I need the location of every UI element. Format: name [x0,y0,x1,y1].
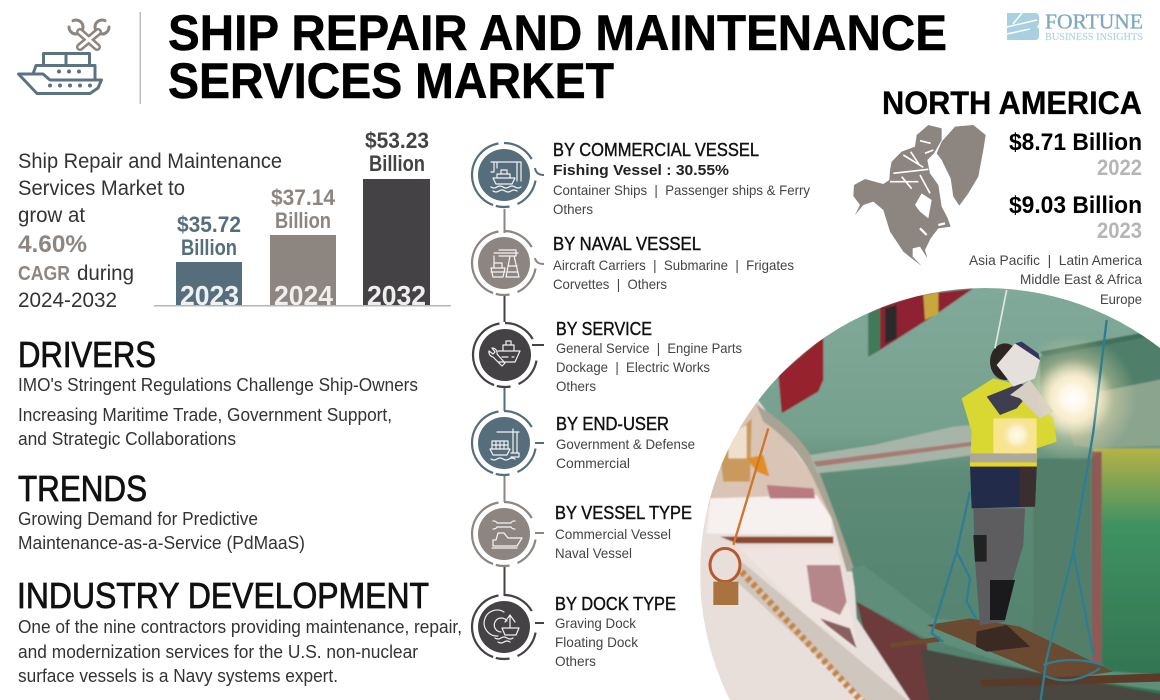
segment: by service: BY SERVICE [556,319,652,339]
bar 2032: Billion [369,151,425,176]
panel: drivers: and Strategic Collaborations [18,428,236,449]
segment: by end-user [472,411,695,475]
segment: by commercial vessel: Container Ships | Passenger ships & Ferry [553,182,810,198]
icon: ship with wrench [473,323,544,387]
segment: by vessel type: BY VESSEL TYPE [555,503,692,523]
segment: by end-user: BY END-USER [556,414,669,434]
map: North America [853,125,986,266]
segment: by commercial vessel: Others [553,201,593,217]
segment: by naval vessel: Corvettes | Others [553,276,667,292]
segment: by dock type: Graving Dock [555,615,637,631]
panel: trends [18,468,305,553]
segment: by commercial vessel: BY COMMERCIAL VESSEL [553,140,759,160]
segment: by service: Dockage | Electric Works [556,359,710,375]
icon: crane and naval ship [472,231,544,295]
icon: ship with crossed wrenches [18,20,109,94]
panel: North America statistics: 2022 [1097,155,1142,180]
segment: by naval vessel [472,231,794,295]
segment: by end-user: Government & Defense [556,436,695,452]
bar 2023 [176,212,242,311]
segment: by end-user: Commercial [556,455,630,471]
bar 2023: Billion [181,235,237,260]
panel: drivers: DRIVERS [18,334,156,375]
segment: by dock type: BY DOCK TYPE [555,594,676,614]
icon: gear and ship [472,595,544,659]
panel: industry development: INDUSTRY DEVELOPMENT [17,575,429,616]
panel: North America statistics [882,85,1142,307]
segment: by naval vessel: BY NAVAL VESSEL [553,234,701,254]
photo: welder on ship hull [700,285,1160,700]
segment: by dock type: Others [555,653,596,669]
bar 2032 [363,128,430,311]
segment: by service [473,319,742,394]
icon: ship in dock [472,143,544,207]
title [168,5,947,109]
bar 2024: $37.14 [271,185,336,210]
panel: drivers: Increasing Maritime Trade, Government Support, [18,404,392,425]
panel: North America statistics: Middle East & Africa [1020,271,1142,287]
panel: North America statistics: NORTH AMERICA [882,85,1142,121]
panel: industry development: surface vessels is a Navy systems expert. [18,665,338,686]
bar chart: market size [154,128,451,311]
logo: Fortune Business Insights: FORTUNE [1045,10,1143,34]
segment: by service: Others [556,378,596,394]
panel: industry development [17,575,462,686]
segment: by vessel type: Commercial Vessel [555,526,671,542]
logo: Fortune Business Insights [1007,10,1143,43]
segment: by dock type [472,594,676,669]
segment: by commercial vessel: Fishing Vessel : 30.55% [553,162,729,179]
icon: wrench over ship [472,502,544,566]
bar 2024: Billion [275,208,331,233]
text block: market growth summary [18,150,282,312]
bar 2023: $35.72 [177,212,241,237]
segment: by service: General Service | Engine Parts [556,340,742,356]
text block: market growth summary: grow at [18,204,85,227]
bar 2032: $53.23 [365,128,429,153]
panel: North America statistics: Europe [1100,291,1142,307]
bar 2032: 2032 [367,280,426,311]
segment: by vessel type [472,502,692,566]
panel: North America statistics: $8.71 Billion [1009,129,1142,156]
bar 2023: 2023 [180,280,239,311]
panel: North America statistics: Asia Pacific | Latin America [969,252,1142,268]
text block: market growth summary: during [77,262,134,285]
text block: market growth summary: CAGR [18,263,70,285]
title: SERVICES MARKET [168,53,614,109]
segment: by dock type: Floating Dock [555,634,639,650]
text block: market growth summary: 2024-2032 [18,289,117,312]
text block: market growth summary: Services Market to [18,177,185,200]
segment: by naval vessel: Aircraft Carriers | Submarine | Frigates [553,257,794,273]
segment: by vessel type: Naval Vessel [555,545,632,561]
text block: market growth summary: 4.60% [18,231,87,258]
panel: industry development: One of the nine contractors providing maintenance, repair, [18,616,462,637]
logo: Fortune Business Insights: BUSINESS INSIGHTS [1045,32,1143,43]
segment: by commercial vessel [472,140,810,217]
panel: industry development: and modernization services for the U.S. non-nuclear [18,641,418,662]
icon: container ship and crane [472,411,544,475]
panel: North America statistics: 2023 [1097,218,1142,243]
bar 2024: 2024 [274,280,333,311]
panel: drivers: IMO's Stringent Regulations Challenge Ship-Owners [18,374,418,395]
panel: trends: Growing Demand for Predictive [18,508,258,529]
panel: North America statistics: $9.03 Billion [1009,192,1142,219]
title: SHIP REPAIR AND MAINTENANCE [168,5,947,61]
panel: trends: Maintenance-as-a-Service (PdMaaS) [18,532,305,553]
text block: market growth summary: Ship Repair and Maintenance [18,150,282,173]
connector lines between segments [504,209,506,596]
panel: trends: TRENDS [18,468,147,509]
bar 2024 [270,185,336,311]
panel: drivers [18,334,418,449]
